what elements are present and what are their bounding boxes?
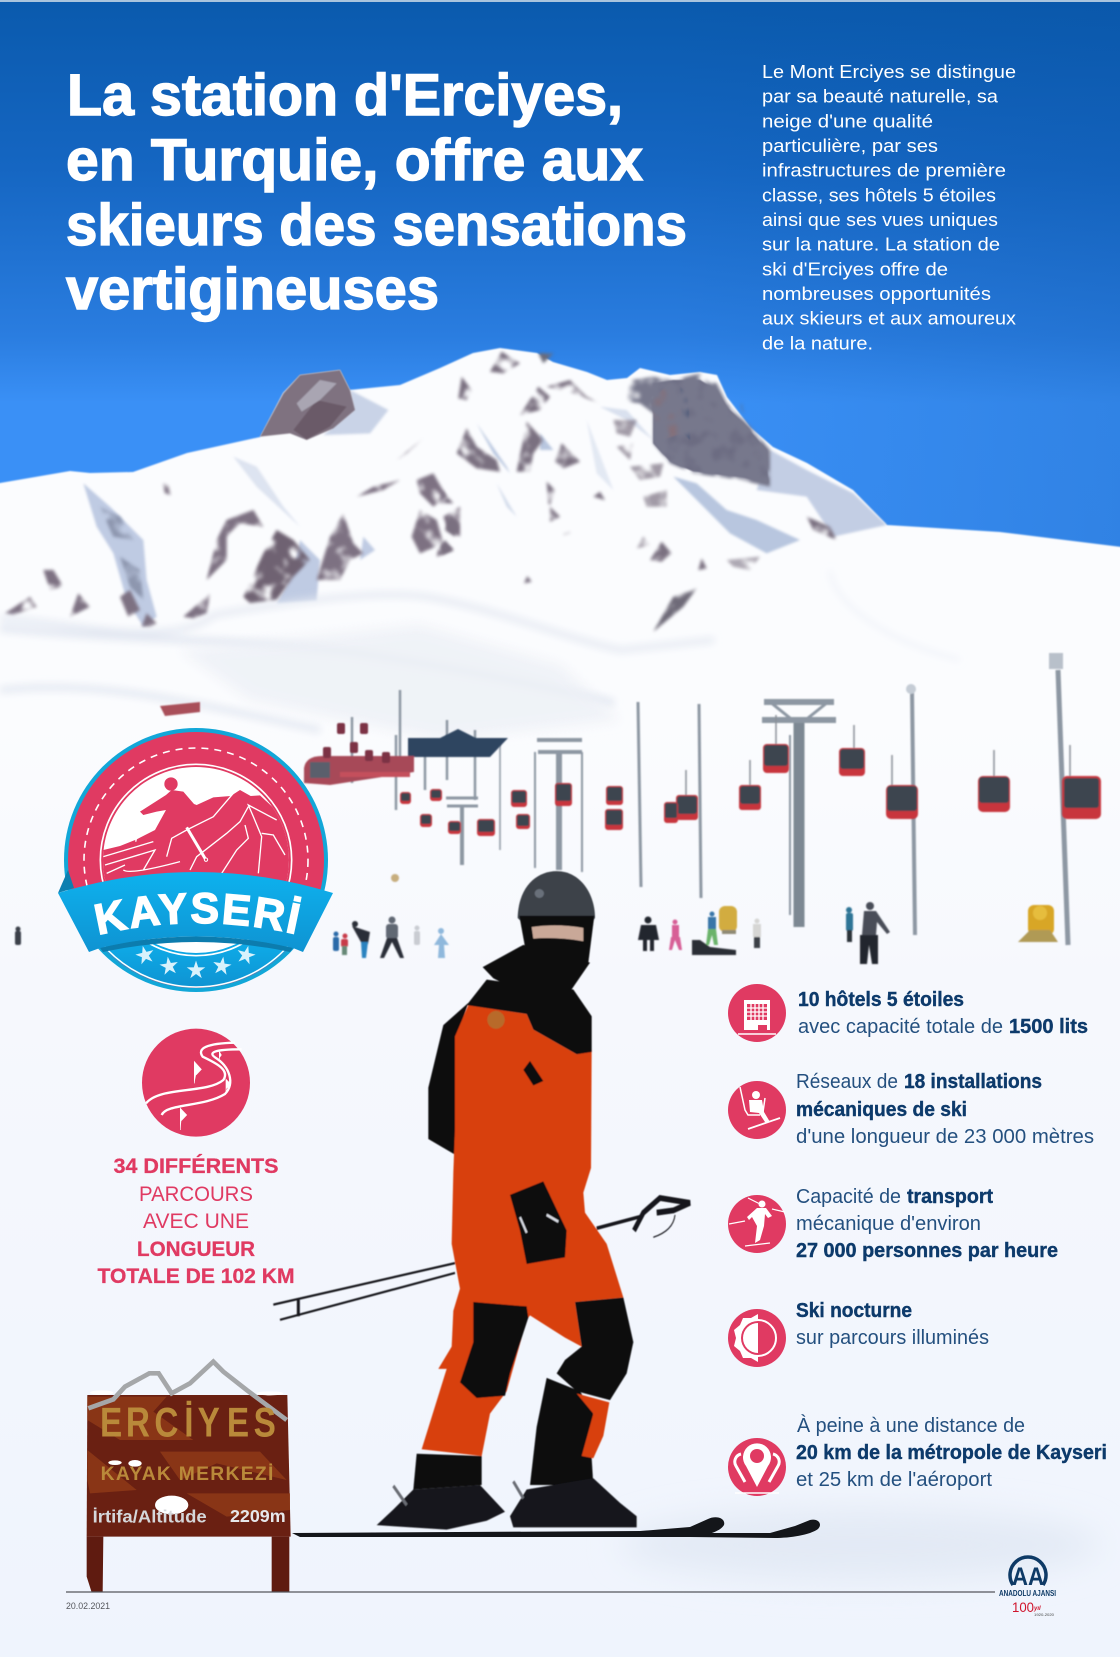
badge ribbon (58, 870, 74, 893)
stat text: TOTALE DE 102 KM (98, 1265, 294, 1288)
intro paragraph: ainsi que ses vues uniques (762, 209, 998, 230)
logo: Anadolu Ajansi: ANADOLU AJANSI (999, 1588, 1056, 1598)
intro paragraph: par sa beauté naturelle, sa (762, 86, 999, 107)
skis (292, 1517, 820, 1538)
badge title: KAYSERİ (94, 892, 302, 935)
sign: Erciyes ski centre: 2209m (230, 1506, 286, 1526)
orange ski suit (422, 1005, 623, 1456)
stat text: LONGUEUR (137, 1238, 255, 1261)
fact: lifts (728, 1071, 1094, 1148)
ski boots (377, 1485, 505, 1530)
backpack (428, 1003, 468, 1155)
icon: map pins (728, 1438, 786, 1496)
badge lower blue cap (89, 930, 303, 988)
badge stars: ★ (185, 957, 207, 984)
background skiers and snow cannons (15, 874, 1058, 964)
badge stars: ★ (131, 940, 159, 971)
fact: night skiing (728, 1300, 989, 1367)
intro paragraph: sur la nature. La station de (762, 234, 1000, 255)
badge dashed ring (84, 748, 308, 972)
badge skier emblem (100, 764, 297, 956)
badge stars: ★ (209, 952, 234, 981)
fact: lifts: mécaniques de ski (796, 1099, 967, 1121)
shoulder patch (487, 1011, 505, 1029)
sign: Erciyes ski centre: İrtifa/Altitude (93, 1507, 207, 1527)
fact: hotels: 1500 lits (1009, 1016, 1088, 1038)
title: vertigineuses (66, 257, 439, 322)
fact: lifts: Réseaux de (796, 1071, 898, 1093)
rocks and shadows: east face (440, 352, 887, 632)
fact: location: À peine à une distance de (797, 1414, 1025, 1437)
icon: winding ski run (142, 1029, 250, 1137)
badge lower white ring (103, 945, 289, 987)
intro paragraph: classe, ses hôtels 5 étoiles (762, 184, 996, 205)
intro paragraph: particulière, par ses (762, 135, 938, 156)
lower right leg (530, 1378, 593, 1485)
intro paragraph: Le Mont Erciyes se distingue (762, 61, 1016, 82)
fact: transport (728, 1186, 1058, 1262)
intro paragraph: ski d'Erciyes offre de (762, 258, 948, 279)
icon: hotel (728, 984, 786, 1042)
sign: Erciyes ski centre: ERCİYES (100, 1399, 276, 1446)
intro paragraph (762, 61, 1017, 353)
icon: skier (728, 1195, 786, 1253)
fact: transport: mécanique d'environ (796, 1213, 981, 1235)
list: resort facts (728, 984, 1107, 1496)
intro paragraph: nombreuses opportunités (762, 283, 991, 304)
logo: Anadolu Ajansi: yıl (1033, 1606, 1041, 1612)
fact: transport: Capacité de (796, 1186, 901, 1208)
badge stars: ★ (232, 940, 260, 971)
logo: Anadolu Ajansi (999, 1557, 1056, 1617)
fact: hotels: avec capacité totale de (798, 1016, 1003, 1038)
panel: slopes stat (98, 1029, 294, 1288)
badge stars (131, 940, 260, 984)
fact: transport: transport (907, 1186, 993, 1208)
collar (483, 945, 590, 994)
sign: Erciyes ski centre (87, 1362, 291, 1592)
date: 20.02.2021 (66, 1601, 110, 1612)
stat text: 34 DIFFÉRENTS (114, 1155, 278, 1178)
title: La station d'Erciyes, (67, 63, 623, 128)
fact: transport: 27 000 personnes par heure (796, 1240, 1058, 1262)
sign: Erciyes ski centre: KAYAK MERKEZİ (101, 1462, 273, 1485)
snow slopes (0, 570, 1100, 1581)
intro paragraph: aux skieurs et aux amoureux (762, 308, 1017, 329)
fact: location (728, 1414, 1107, 1496)
badge: Kayseri (58, 728, 333, 992)
intro paragraph: de la nature. (762, 332, 873, 353)
fact: lifts: 18 installations (904, 1071, 1042, 1093)
stat text: AVEC UNE (143, 1210, 249, 1233)
footer rule (66, 1591, 995, 1593)
black knee patches (460, 1302, 528, 1398)
fact: location: et 25 km de l'aéroport (796, 1469, 992, 1491)
intro paragraph: neige d'une qualité (762, 110, 933, 131)
face (532, 925, 583, 941)
fact: night skiing: sur parcours illuminés (796, 1327, 989, 1349)
stat text (98, 1155, 294, 1288)
rocks and shadows: west face (5, 370, 460, 627)
logo: Anadolu Ajansi: 100 (1012, 1599, 1034, 1615)
mountain (0, 348, 1120, 720)
icon: chairlift (728, 1081, 786, 1139)
background: snow field (0, 555, 1120, 1657)
ski station buildings (160, 702, 508, 785)
gondolas (323, 715, 1101, 836)
ski poles (273, 1198, 690, 1320)
glove (510, 1181, 567, 1264)
title: en Turquie, offre aux (66, 128, 643, 193)
helmet (518, 871, 595, 920)
fact: lifts: d'une longueur de 23 000 mètres (796, 1126, 1094, 1148)
fact: hotels: 10 hôtels 5 étoiles (798, 989, 964, 1011)
badge stars: ★ (157, 952, 182, 981)
ski lift line: towers and poles (352, 653, 1068, 945)
black shoulders (467, 980, 592, 1054)
title: skieurs des sensations (66, 193, 687, 258)
stat text: PARCOURS (139, 1183, 253, 1206)
logo: Anadolu Ajansi: AA (1012, 1563, 1044, 1591)
title (66, 63, 687, 322)
logo: Anadolu Ajansi: 1920-2020 (1034, 1613, 1054, 1617)
main skier (273, 871, 690, 1530)
lower left leg (413, 1454, 482, 1489)
fact: location: 20 km de la métropole de Kayseri (796, 1442, 1107, 1464)
intro paragraph: infrastructures de première (762, 160, 1006, 181)
fact: night skiing: Ski nocturne (796, 1300, 912, 1322)
background: sky (0, 0, 1120, 560)
icon: half sun (728, 1309, 786, 1367)
fact: hotels (728, 984, 1088, 1042)
